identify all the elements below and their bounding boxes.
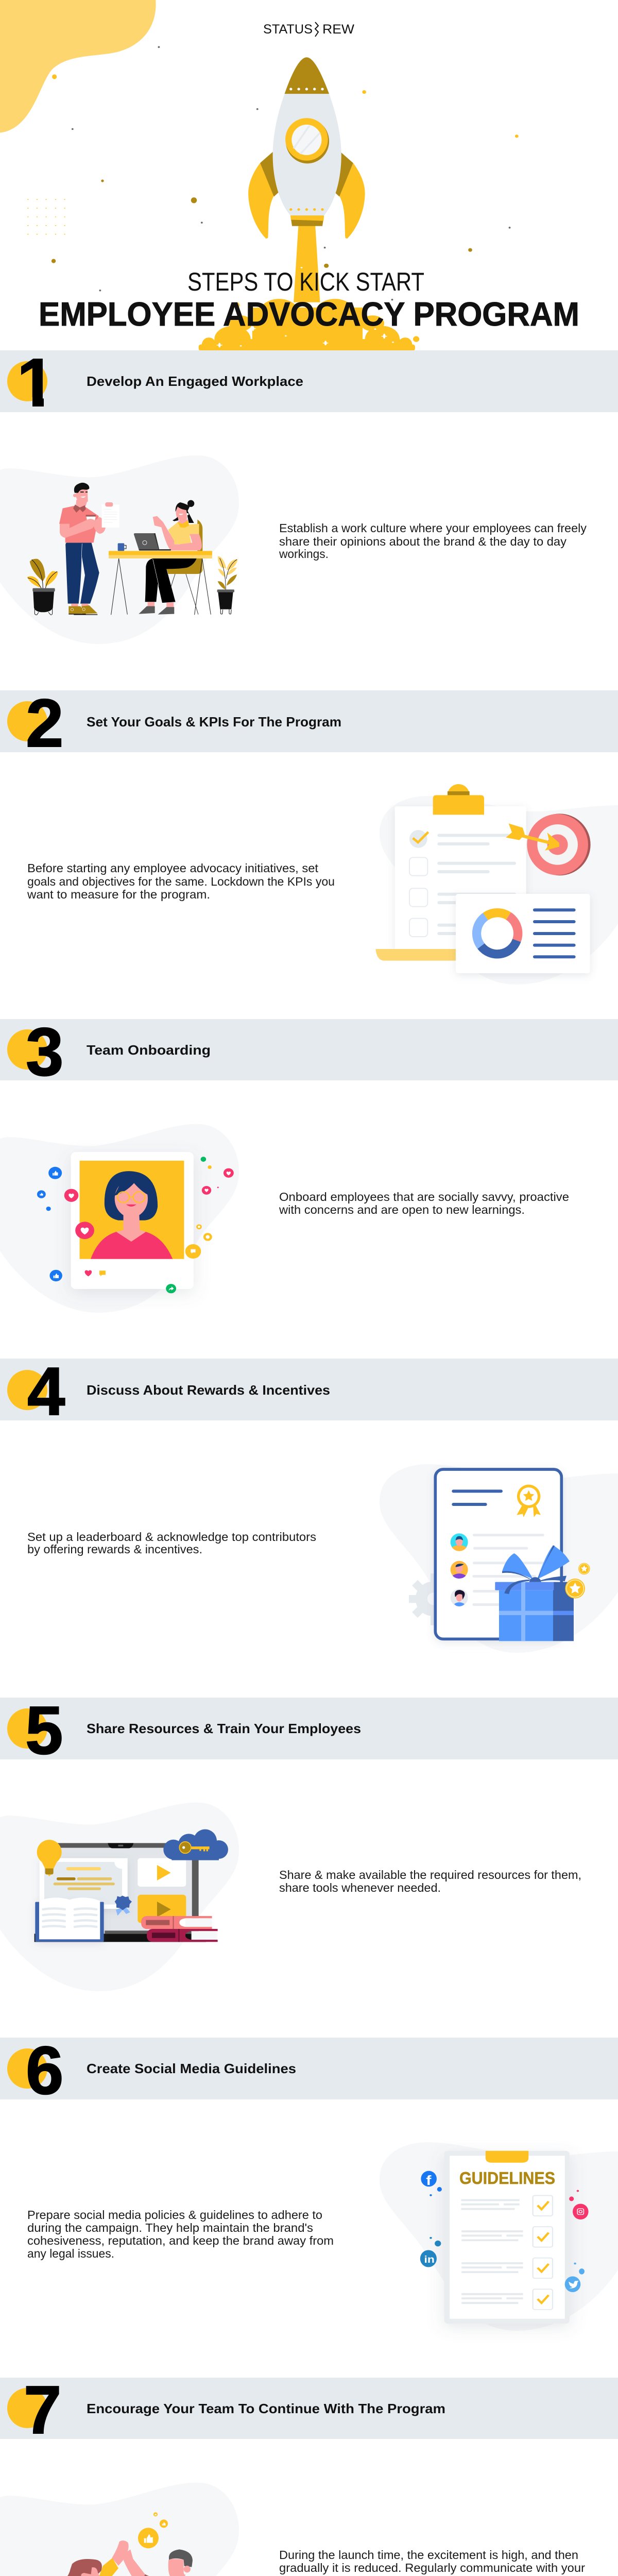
step 7 header band: 7 xyxy=(24,2372,61,2448)
illustration: goals checklist, target and chart xyxy=(375,784,591,973)
woman xyxy=(58,2540,129,2576)
step 7 background blob xyxy=(0,2483,239,2576)
flame sparkles xyxy=(216,267,394,347)
step 3 header band xyxy=(0,1014,618,1090)
rocket body xyxy=(273,94,341,215)
step 7 text: gradually it is reduced. Regularly communicate with your xyxy=(279,2561,585,2574)
step 3 text: with concerns and are open to new learnings. xyxy=(279,1203,525,1216)
step 6 text: during the campaign. They help maintain the brand's xyxy=(27,2221,313,2234)
step 3 background blob xyxy=(0,1124,239,1313)
decorative yellow blob top left xyxy=(0,0,156,133)
target xyxy=(527,814,591,875)
illustration: two colleagues at a desk xyxy=(27,483,238,615)
coffee mug xyxy=(118,543,126,551)
certificate xyxy=(40,1858,132,1916)
step 3 header band: Team Onboarding xyxy=(87,1042,211,1058)
step 6 text: Prepare social media policies & guidelines to adhere to xyxy=(27,2208,322,2222)
profile card xyxy=(71,1152,194,1289)
desk xyxy=(109,551,212,615)
social icons xyxy=(420,2171,589,2292)
step 2 header band: 2 xyxy=(26,685,63,761)
open book xyxy=(35,1897,104,1942)
rocket window xyxy=(286,119,329,163)
step 1 text: share their opinions about the brand & the day to day xyxy=(279,535,567,548)
step 1 background blob xyxy=(0,455,239,644)
step 4 header band xyxy=(0,1353,618,1429)
rocket nozzle xyxy=(290,215,324,226)
step 2 background blob xyxy=(380,796,618,985)
illustration: colleagues high five xyxy=(27,2512,231,2576)
user avatars xyxy=(451,1533,468,1606)
step 1 text: workings. xyxy=(279,547,329,561)
man xyxy=(124,2549,208,2576)
step 4 text: Set up a leaderboard & acknowledge top contributors xyxy=(27,1530,316,1544)
step 2 text: goals and objectives for the same. Lockdown the KPIs you xyxy=(27,875,335,888)
step 5 header band: 5 xyxy=(25,1692,63,1768)
step 1 header band: 1 xyxy=(17,345,55,420)
checklist rows xyxy=(461,2195,553,2310)
step 2 header band xyxy=(0,685,618,761)
rocket fins xyxy=(248,163,274,239)
step 2 text: Before starting any employee advocacy initiatives, set xyxy=(27,861,319,875)
illustration: rocket launching xyxy=(199,57,419,352)
laptop xyxy=(134,533,171,551)
step 3 text xyxy=(279,1190,569,1216)
step 5 text: share tools whenever needed. xyxy=(279,1881,441,1894)
step 5 header band xyxy=(0,1692,618,1768)
logo: Statusbrew header: REW xyxy=(322,22,354,37)
like icons xyxy=(138,2512,168,2548)
step 4 background blob xyxy=(380,1464,618,1653)
laptop with screen xyxy=(35,1843,206,1942)
social icons: f xyxy=(426,2173,432,2188)
stacked books xyxy=(141,1916,218,1942)
step 3 header band: 3 xyxy=(26,1014,63,1090)
step 4 text xyxy=(27,1530,316,1556)
logo: Statusbrew header xyxy=(263,22,354,37)
reaction icons xyxy=(37,1157,234,1293)
left plant xyxy=(27,559,58,615)
illustration: guidelines clipboard xyxy=(420,2151,589,2324)
step 5 background blob xyxy=(0,1803,239,1991)
arrow hitting target xyxy=(506,823,559,851)
gift box xyxy=(495,1545,574,1641)
step 5 header band: Share Resources & Train Your Employees xyxy=(87,1721,361,1736)
clipboard xyxy=(444,2151,570,2324)
logo: Statusbrew header: STATUS xyxy=(263,22,313,37)
step 3 text: Onboard employees that are socially savvy, proactive xyxy=(279,1190,569,1204)
cloud with key xyxy=(163,1829,228,1860)
award ribbon xyxy=(517,1485,541,1517)
step 7 text: During the launch time, the excitement is high, and then xyxy=(279,2548,578,2562)
step 4 header band: Discuss About Rewards & Incentives xyxy=(87,1382,330,1398)
step 2 text xyxy=(27,861,335,901)
step 6 header band: 6 xyxy=(26,2032,63,2108)
step 7 header band: Encourage Your Team To Continue With The Program xyxy=(87,2401,445,2416)
step 6 header band: Create Social Media Guidelines xyxy=(87,2061,296,2076)
step 1 header band: Develop An Engaged Workplace xyxy=(87,374,303,389)
step 6 header band xyxy=(0,2032,618,2108)
leaderboard phone xyxy=(435,1469,561,1639)
clipboard checklist xyxy=(375,784,526,961)
illustration: learning resources on a laptop xyxy=(35,1829,228,1942)
rocket nose xyxy=(285,57,329,94)
title: EMPLOYEE ADVOCACY PROGRAM xyxy=(39,295,579,333)
step 7 text xyxy=(279,2548,585,2576)
step 4 text: by offering rewards & incentives. xyxy=(27,1543,202,1556)
step 4 header band: 4 xyxy=(27,1353,65,1429)
step 1 text: Establish a work culture where your employees can freely xyxy=(279,521,587,535)
gear xyxy=(409,1573,457,1625)
rocket flame and smoke xyxy=(199,226,419,352)
right plant xyxy=(217,556,238,614)
man with document xyxy=(59,483,119,615)
video cards xyxy=(138,1858,186,1923)
step 6 background blob xyxy=(380,2142,618,2331)
step 5 text xyxy=(279,1868,581,1894)
step 1 header band xyxy=(0,350,618,412)
social icons: in xyxy=(424,2255,435,2265)
step 7 header band xyxy=(0,2372,618,2448)
title xyxy=(39,267,579,333)
step 6 text: cohesiveness, reputation, and keep the brand away from xyxy=(27,2234,334,2247)
light bulb xyxy=(37,1840,62,1876)
guidelines label: GUIDELINES xyxy=(459,2168,555,2188)
step 5 text: Share & make available the required resources for them, xyxy=(279,1868,581,1882)
speckled background dots xyxy=(27,46,519,300)
illustration: leaderboard with reward gift xyxy=(409,1469,590,1641)
chair xyxy=(166,519,202,615)
step 2 text: want to measure for the program. xyxy=(27,888,210,901)
step 1 text xyxy=(279,521,587,561)
chart card xyxy=(456,894,590,973)
step 6 text xyxy=(27,2208,334,2260)
step 2 header band: Set Your Goals & KPIs For The Program xyxy=(87,714,341,730)
step 6 text: any legal issues. xyxy=(27,2247,114,2260)
woman at laptop xyxy=(139,500,202,615)
illustration: employee profile card with reactions xyxy=(37,1152,234,1293)
title: STEPS TO KICK START xyxy=(187,267,424,296)
reward coins xyxy=(565,1563,590,1599)
